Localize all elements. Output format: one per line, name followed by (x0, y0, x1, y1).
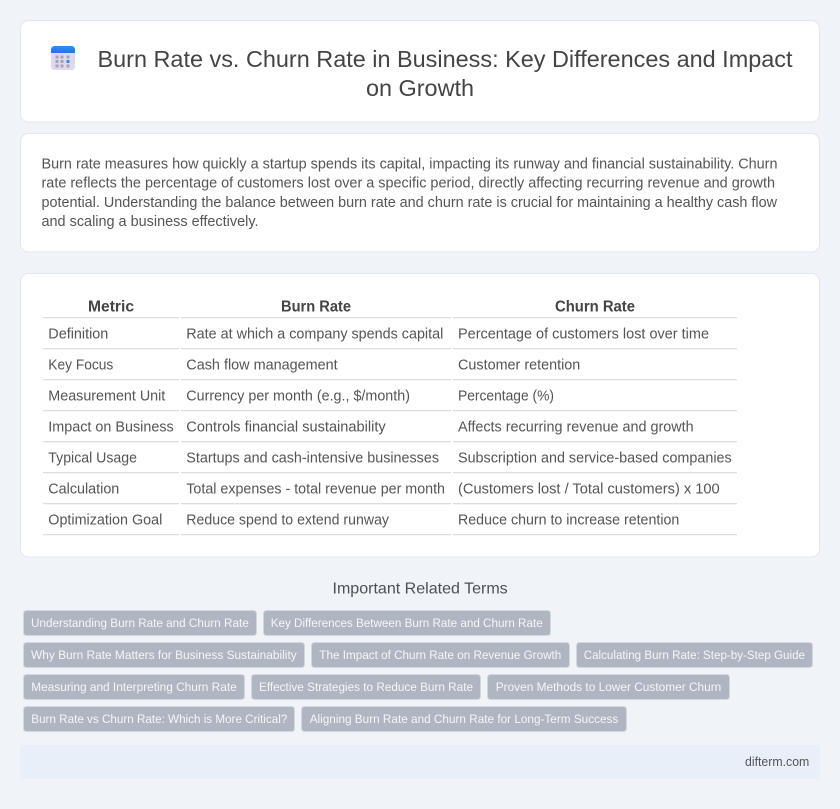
tag: Why Burn Rate Matters for Business Sustainability (31, 648, 298, 662)
row: impact on business (48, 420, 694, 436)
table header: Metric (88, 299, 134, 316)
tag (252, 674, 480, 700)
row: key focus: Cash flow management (186, 357, 338, 373)
panel: summary paragraph: Burn rate measures how quickly a startup spends its capital, impacting its runway and financial sustainability. Churn (42, 156, 778, 172)
tag (24, 610, 256, 636)
tag: Effective Strategies to Reduce Burn Rate (259, 680, 473, 694)
tag: Burn Rate vs Churn Rate: Which is More Critical? (31, 712, 288, 726)
row: optimization goal: Reduce spend to extend runway (186, 513, 390, 529)
row: calculation (48, 482, 720, 498)
row: definition: Percentage of customers lost over time (458, 326, 709, 342)
tag (576, 642, 812, 668)
tag (264, 610, 550, 636)
footer bar: difterm.com (745, 754, 809, 769)
tag: Understanding Burn Rate and Churn Rate (31, 616, 249, 630)
table header (88, 299, 635, 316)
tag: Measuring and Interpreting Churn Rate (31, 680, 237, 694)
row: measurement unit: Percentage (%) (458, 388, 554, 404)
row: key focus: Customer retention (458, 357, 580, 373)
row: measurement unit: Currency per month (e.g., $/month) (186, 388, 410, 404)
tag: Key Differences Between Burn Rate and Churn Rate (271, 616, 543, 630)
row: measurement unit (48, 388, 554, 404)
row: key focus (48, 357, 580, 373)
row: calculation: (Customers lost / Total customers) x 100 (458, 482, 720, 498)
panel: summary paragraph: rate reflects the percentage of customers lost over a specific period, directly affecting recurring revenue and growth (42, 176, 775, 192)
title (98, 46, 793, 101)
row: calculation: Total expenses - total revenue per month (186, 482, 445, 498)
row: key focus: Key Focus (48, 357, 113, 373)
row: measurement unit: Measurement Unit (48, 388, 165, 404)
table header: Burn Rate (281, 299, 351, 316)
row: typical usage: Typical Usage (48, 451, 137, 467)
tag: Proven Methods to Lower Customer Churn (496, 680, 721, 694)
row: typical usage: Startups and cash-intensive businesses (186, 451, 439, 467)
tag (24, 642, 304, 668)
row: impact on business: Controls financial sustainability (186, 420, 387, 436)
tag (302, 706, 626, 732)
row: calculation: Calculation (48, 482, 119, 498)
row: typical usage (48, 451, 732, 467)
footer bar (20, 745, 820, 779)
heading: related terms: Important Related Terms (332, 580, 508, 597)
table header: Churn Rate (555, 299, 635, 316)
row: optimization goal: Optimization Goal (48, 513, 162, 529)
title: on Growth (366, 75, 474, 101)
row: definition: Definition (48, 326, 108, 342)
panel: comparison table (20, 274, 820, 557)
row: optimization goal (48, 513, 679, 529)
tag (24, 706, 294, 732)
title: Burn Rate vs. Churn Rate in Business: Key Differences and Impact (98, 46, 793, 72)
row: typical usage: Subscription and service-based companies (458, 451, 732, 467)
tag (24, 674, 244, 700)
tag: Aligning Burn Rate and Churn Rate for Long-Term Success (310, 712, 618, 726)
row: impact on business: Affects recurring revenue and growth (458, 420, 694, 436)
row: impact on business: Impact on Business (48, 420, 174, 436)
tag: Calculating Burn Rate: Step-by-Step Guide (584, 648, 805, 662)
panel: summary paragraph: and scaling a business effectively. (42, 214, 258, 230)
panel: summary paragraph: potential. Understanding the balance between burn rate and churn rate is crucial for maintaining a healthy cash flow (42, 195, 778, 211)
tag (312, 642, 570, 668)
icon: calendar (51, 46, 75, 70)
row: definition (48, 326, 709, 342)
panel: title card (20, 20, 820, 122)
related term tags (24, 610, 812, 732)
tag: The Impact of Churn Rate on Revenue Growth (319, 648, 561, 662)
row: definition: Rate at which a company spends capital (186, 326, 443, 342)
panel: summary paragraph (20, 134, 820, 252)
tag (488, 674, 730, 700)
row: optimization goal: Reduce churn to increase retention (458, 513, 679, 529)
